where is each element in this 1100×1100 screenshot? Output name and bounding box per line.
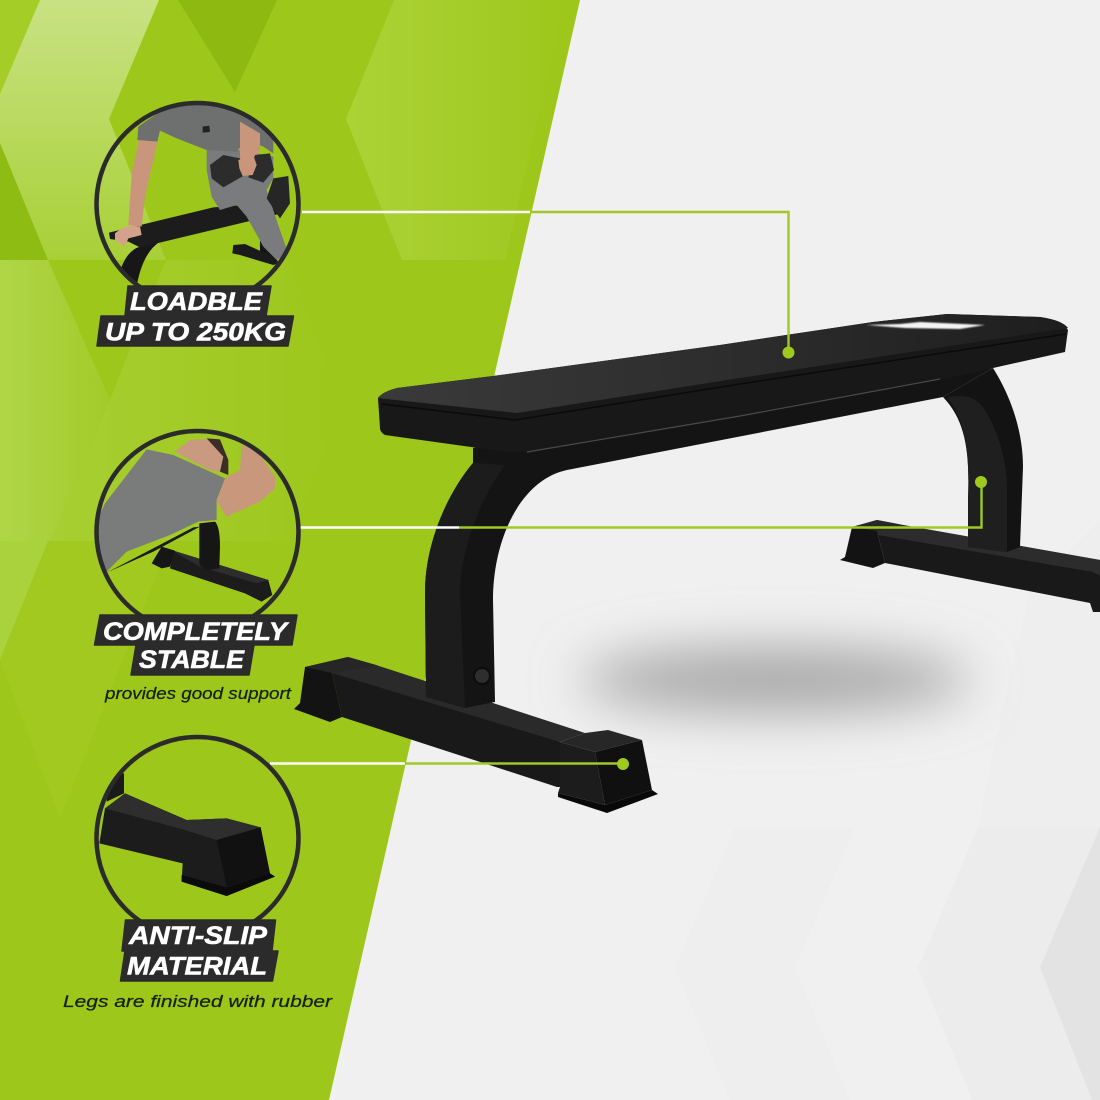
callout 3: anti-slip bbox=[270, 758, 629, 770]
floor shadow bbox=[580, 648, 970, 712]
sub text 2: provides good support bbox=[104, 684, 292, 703]
bolt bbox=[474, 668, 490, 684]
label 2 bbox=[94, 615, 297, 675]
callout 1: loadable bbox=[302, 212, 794, 358]
main product: flat bench bbox=[294, 314, 1100, 813]
circle photo 2: man lying on bench bbox=[96, 431, 298, 633]
front foot bbox=[294, 657, 658, 813]
label 3: ANTI-SLIP bbox=[128, 922, 267, 950]
seat bbox=[378, 314, 1068, 453]
label 1 bbox=[97, 286, 294, 346]
back foot bbox=[840, 520, 1100, 612]
circle photo 3: rubber foot bbox=[96, 737, 298, 939]
seat logo bbox=[866, 322, 985, 329]
callout 2: stable bbox=[300, 476, 987, 528]
circle photo 1: man rowing on bench bbox=[96, 103, 298, 305]
sub text 3: Legs are finished with rubber bbox=[63, 992, 334, 1011]
label 3 bbox=[120, 920, 278, 981]
label 3: MATERIAL bbox=[127, 952, 267, 980]
label 1: LOADBLE bbox=[130, 288, 263, 316]
green panel bbox=[0, 0, 580, 1100]
label 2: COMPLETELY bbox=[103, 618, 290, 646]
back leg bbox=[943, 368, 1023, 552]
label 1: UP TO 250KG bbox=[105, 318, 286, 346]
front leg and rail bbox=[425, 368, 993, 708]
label 2: STABLE bbox=[139, 646, 245, 674]
